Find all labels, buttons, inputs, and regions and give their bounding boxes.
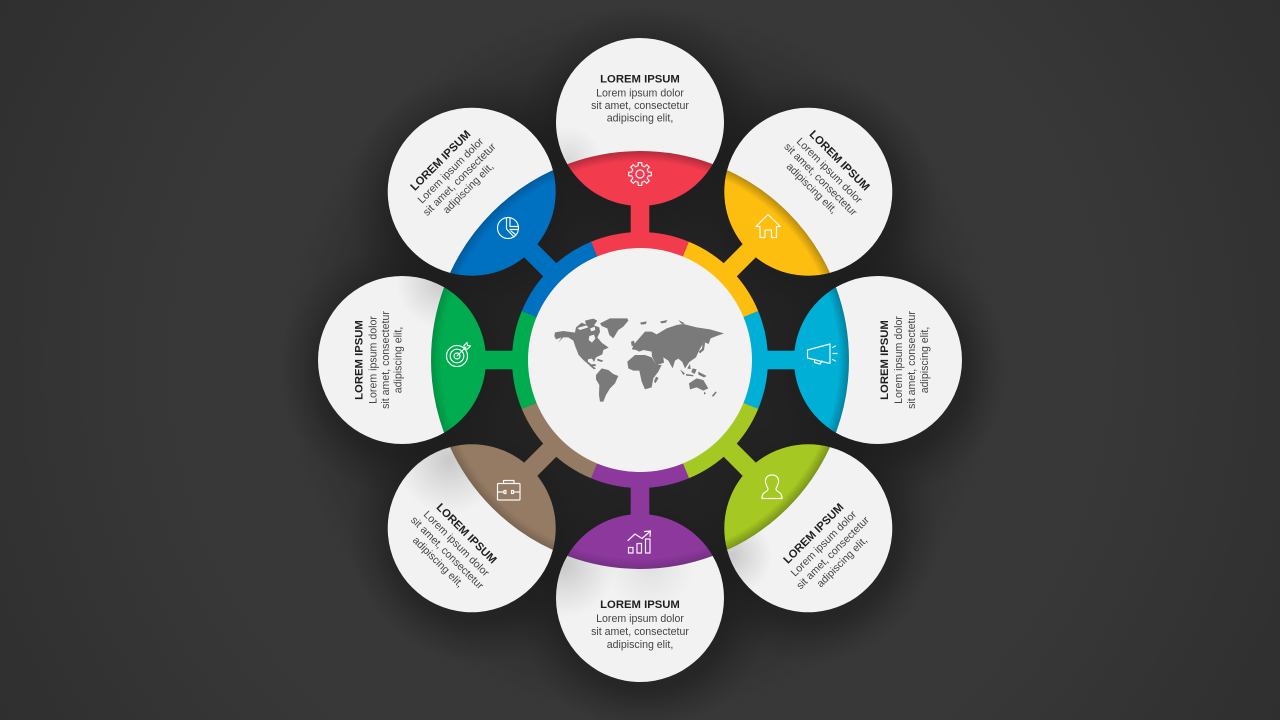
text: lime circle: Lorem ipsum dolor	[789, 508, 859, 579]
panel: purple bottom circle	[556, 464, 724, 682]
text: purple circle: adipiscing elit,	[607, 639, 673, 651]
purple petal, stem and ring segment	[556, 464, 724, 682]
text: blue circle: adipiscing elit,	[441, 161, 496, 216]
text: brown circle: LOREM IPSUM	[434, 502, 498, 566]
text: cyan circle: adipiscing elit,	[919, 327, 931, 393]
yellow petal, stem and ring segment	[646, 73, 927, 354]
text: blue circle	[402, 122, 508, 227]
text: red circle	[591, 74, 689, 124]
panel: cyan right circle	[732, 276, 962, 444]
icon: pie chart	[498, 218, 518, 238]
text: red circle: LOREM IPSUM	[600, 74, 680, 86]
text: green circle: Lorem ipsum dolor	[368, 316, 380, 404]
text: lime circle	[775, 495, 881, 601]
text: brown circle	[399, 495, 505, 601]
text: brown circle: Lorem ipsum dolor	[421, 509, 492, 579]
text: blue circle: sit amet, consectetur	[421, 141, 499, 218]
text: green circle: sit amet, consectetur	[380, 311, 392, 409]
text: red circle: Lorem ipsum dolor	[596, 88, 684, 100]
text: brown circle: adipiscing elit,	[410, 534, 466, 590]
text: purple circle	[591, 599, 689, 651]
text: lime circle: LOREM IPSUM	[782, 502, 846, 566]
text: yellow circle	[773, 122, 878, 228]
green petal, stem and ring segment	[318, 276, 536, 444]
text: yellow circle: Lorem ipsum dolor	[794, 136, 865, 206]
icon: person	[762, 475, 782, 498]
panel: brown bottom-left circle	[388, 403, 597, 612]
text: red circle: sit amet, consectetur	[591, 100, 689, 112]
text: brown circle: sit amet, consectetur	[408, 514, 486, 592]
brown petal, stem and ring segment	[388, 403, 597, 612]
icon: gear	[629, 163, 651, 185]
icon: chart	[628, 531, 650, 553]
text: purple circle: LOREM IPSUM	[600, 599, 680, 611]
blue petal, stem and ring segment	[353, 73, 634, 354]
text: blue circle: LOREM IPSUM	[409, 129, 473, 193]
text: purple circle: Lorem ipsum dolor	[596, 613, 684, 625]
text: lime circle: adipiscing elit,	[814, 534, 870, 590]
text: yellow circle: sit amet, consectetur	[782, 141, 859, 219]
dark shadow behind the diagram	[278, 0, 1010, 720]
center circle	[528, 248, 752, 472]
text: green circle	[354, 311, 404, 409]
text: red circle: adipiscing elit,	[607, 112, 673, 124]
text: blue circle: Lorem ipsum dolor	[416, 135, 486, 206]
text: lime circle: sit amet, consectetur	[794, 514, 872, 592]
icon: megaphone	[808, 344, 837, 364]
lime petal, stem and ring segment	[683, 402, 892, 612]
text: cyan circle: LOREM IPSUM	[879, 320, 891, 400]
text: cyan circle: sit amet, consectetur	[906, 311, 918, 409]
text: yellow circle: LOREM IPSUM	[807, 129, 871, 193]
text: purple circle: sit amet, consectetur	[591, 626, 689, 638]
text: green circle: LOREM IPSUM	[354, 320, 366, 400]
text: green circle: adipiscing elit,	[392, 327, 404, 393]
text: yellow circle: adipiscing elit,	[784, 161, 839, 216]
panel: blue top-left circle	[353, 73, 634, 354]
panel: yellow top-right circle	[646, 73, 927, 354]
text: cyan circle	[879, 311, 931, 409]
cyan petal, stem and ring segment	[732, 276, 962, 444]
panel: red top circle	[556, 38, 724, 256]
text: cyan circle: Lorem ipsum dolor	[893, 316, 905, 404]
panel: lime bottom-right circle	[683, 402, 892, 612]
icon: house	[756, 214, 780, 238]
red petal, stem and ring segment	[556, 38, 724, 256]
icon: briefcase	[498, 480, 520, 500]
world map	[554, 318, 724, 402]
panel: green left circle	[318, 276, 536, 444]
icon: target	[446, 342, 470, 366]
